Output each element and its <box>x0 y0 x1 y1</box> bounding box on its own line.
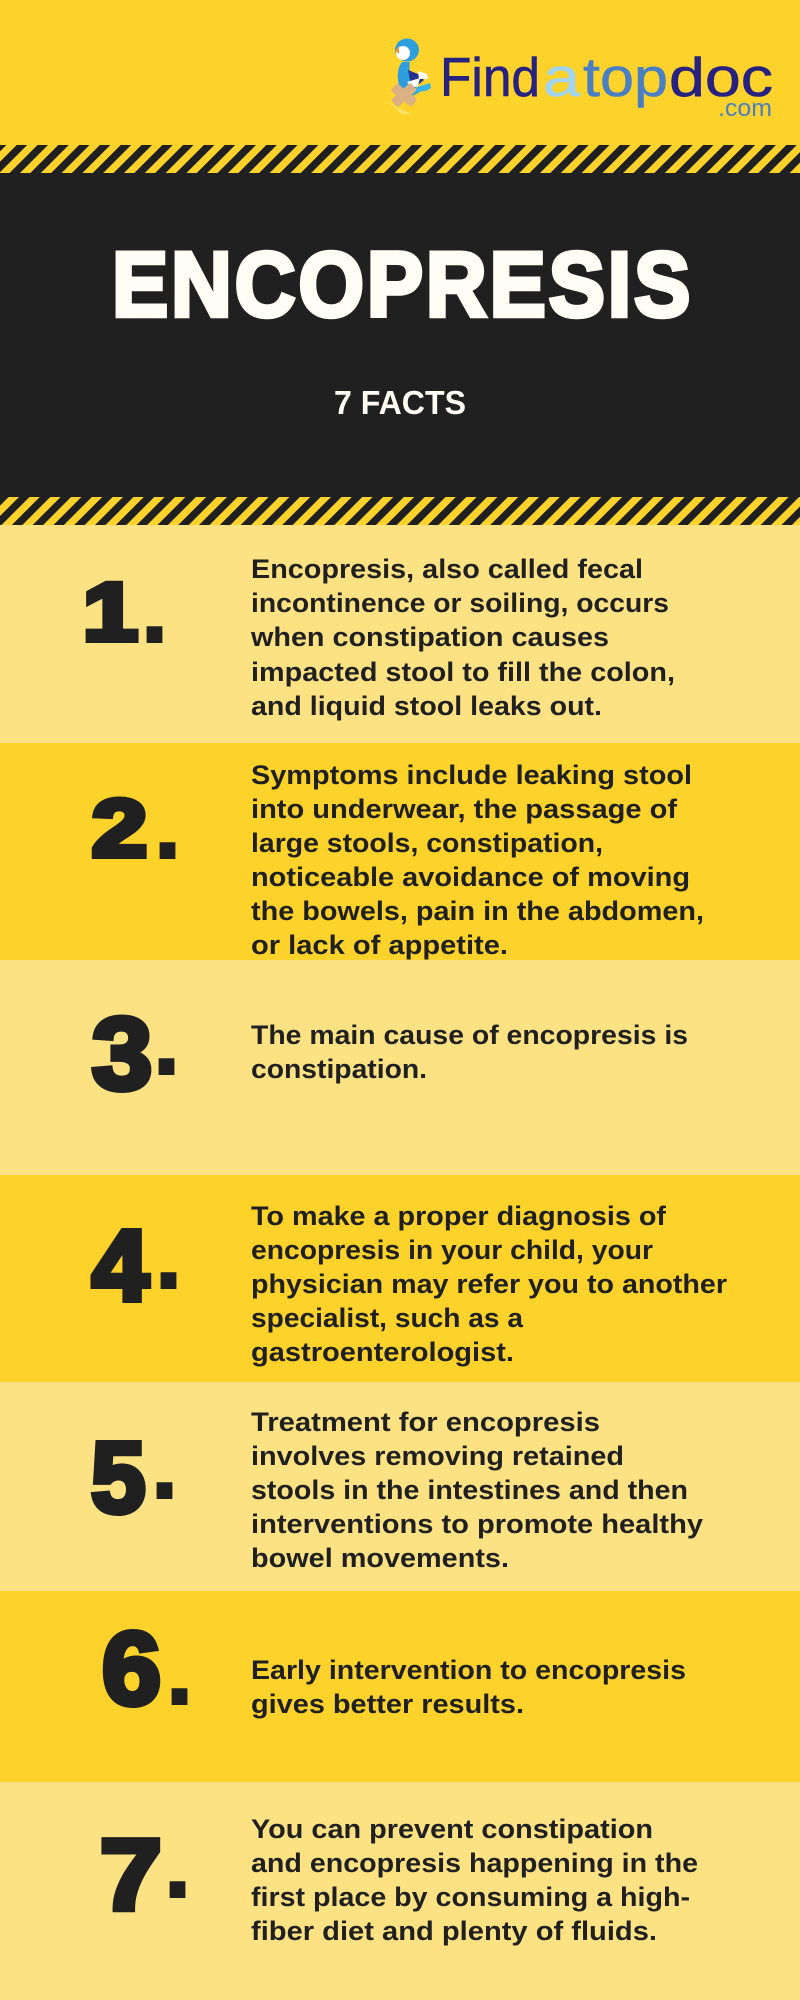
fact 5 text: interventions to promote healthy <box>251 1509 703 1539</box>
number 1 <box>83 542 170 667</box>
fact 1 text: and liquid stool leaks out. <box>251 691 602 721</box>
panel: fact 3 <box>0 960 800 1175</box>
number 1: . <box>139 542 170 667</box>
number 3 <box>92 974 182 1111</box>
fact 5 text: stools in the intestines and then <box>251 1475 688 1505</box>
fact 5 text <box>251 1407 703 1573</box>
logo wordmark: top <box>583 46 668 108</box>
fact 4 text: To make a proper diagnosis of <box>251 1201 667 1231</box>
number 5 <box>91 1398 180 1533</box>
number 7 <box>100 1797 193 1931</box>
panel: fact 6 <box>0 1591 800 1782</box>
subtitle: 7 FACTS <box>334 384 466 421</box>
fact 6 text: Early intervention to encopresis <box>251 1655 686 1685</box>
number 1: 1 <box>83 567 138 658</box>
header band <box>0 0 800 145</box>
panel: fact 1 <box>0 525 800 743</box>
number 4: 4 <box>92 1211 149 1322</box>
fact 2 text: the bowels, pain in the abdomen, <box>251 896 704 926</box>
logo wordmark: a <box>543 46 580 108</box>
number 2: . <box>152 758 183 883</box>
number 4: . <box>153 1188 184 1313</box>
number 7: 7 <box>100 1819 162 1931</box>
fact 2 text: or lack of appetite. <box>251 930 508 960</box>
fact 5 text: Treatment for encopresis <box>251 1407 600 1437</box>
number 3: 3 <box>92 998 152 1111</box>
fact 4 text: encopresis in your child, your <box>251 1235 654 1265</box>
fact 7 text <box>251 1814 698 1946</box>
title: ENCOPRESIS <box>112 233 693 336</box>
fact 7 text: You can prevent constipation <box>251 1814 653 1844</box>
fact 2 text: large stools, constipation, <box>251 828 603 858</box>
fact 2 text: noticeable avoidance of moving <box>251 862 690 892</box>
fact 1 text: impacted stool to fill the colon, <box>251 657 675 687</box>
number 6: 6 <box>102 1611 161 1727</box>
number 2 <box>92 758 183 883</box>
number 4 <box>92 1188 184 1322</box>
logo suffix: .com <box>718 95 772 122</box>
logo wordmark: Find <box>440 46 540 108</box>
number 5: 5 <box>91 1421 146 1533</box>
fact 5 text: involves removing retained <box>251 1441 624 1471</box>
fact 1 text: incontinence or soiling, occurs <box>251 588 669 618</box>
fact 1 text: when constipation causes <box>250 622 609 652</box>
fact 2 text: Symptoms include leaking stool <box>251 760 692 790</box>
title panel <box>0 173 800 497</box>
fact 7 text: and encopresis happening in the <box>251 1848 698 1878</box>
fact 4 text: specialist, such as a <box>251 1303 524 1333</box>
fact 3 text <box>251 1020 688 1084</box>
icon: bird mascot with bandage <box>386 38 431 114</box>
number 2: 2 <box>92 783 147 874</box>
number 5: . <box>149 1398 180 1523</box>
panel: fact 2 <box>0 743 800 960</box>
fact 2 text <box>251 760 704 960</box>
panel: fact 5 <box>0 1382 800 1591</box>
fact 3 text: The main cause of encopresis is <box>251 1020 688 1050</box>
logo wordmark <box>440 46 773 108</box>
number 6: . <box>164 1604 195 1729</box>
fact 6 text: gives better results. <box>251 1689 524 1719</box>
fact 7 text: first place by consuming a high- <box>251 1882 690 1912</box>
panel: fact 7 <box>0 1782 800 2000</box>
logo wordmark: doc <box>669 46 773 108</box>
fact 3 text: constipation. <box>251 1054 427 1084</box>
fact 4 text: physician may refer you to another <box>251 1269 728 1299</box>
fact 4 text: gastroenterologist. <box>251 1337 514 1367</box>
fact 5 text: bowel movements. <box>251 1543 509 1573</box>
number 3: . <box>151 974 182 1099</box>
fact 6 text <box>251 1655 686 1719</box>
logo <box>386 38 773 122</box>
fact 2 text: into underwear, the passage of <box>251 794 678 824</box>
fact 1 text: Encopresis, also called fecal <box>251 554 643 584</box>
number 6 <box>102 1604 195 1729</box>
panel: fact 4 <box>0 1175 800 1382</box>
fact 4 text <box>251 1201 728 1367</box>
fact 1 text <box>250 554 675 721</box>
fact 7 text: fiber diet and plenty of fluids. <box>251 1916 657 1946</box>
number 7: . <box>162 1797 193 1922</box>
